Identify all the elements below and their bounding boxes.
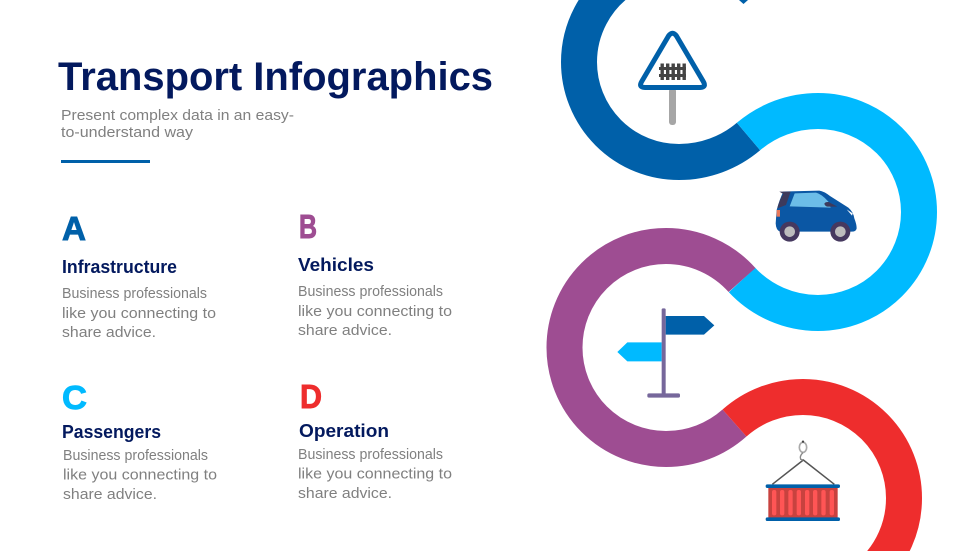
sign tip at top edge — [739, 0, 748, 4]
panel: infrastructure — [62, 210, 216, 341]
text block: Business professionals — [298, 446, 443, 463]
icon: railroad crossing sign — [641, 33, 704, 125]
icon: car — [776, 191, 857, 242]
container top bar — [766, 484, 840, 488]
heading: Operation: Operation — [299, 420, 389, 441]
text block: share advice. — [62, 324, 156, 341]
sign triangle — [641, 33, 704, 88]
container body — [768, 487, 838, 518]
title underline — [61, 160, 150, 163]
subtitle: to-understand way — [61, 124, 194, 141]
text block: Business professionals — [63, 447, 208, 464]
left sign — [617, 342, 662, 361]
text block: like you connecting to — [63, 466, 217, 484]
heading: Passengers: Passengers — [62, 421, 161, 442]
icon: shipping container on crane hook — [766, 440, 840, 521]
window — [790, 193, 831, 208]
car body — [776, 191, 857, 232]
hook — [799, 440, 807, 460]
letter C: C — [62, 379, 87, 416]
serpentine road chart — [564, 0, 919, 551]
road segment: blue — [579, 0, 748, 162]
text block — [63, 447, 217, 503]
text block: Business professionals — [62, 285, 207, 302]
road segment: cyan — [742, 111, 919, 313]
tail light — [777, 210, 780, 217]
rear window — [777, 192, 791, 208]
text block: like you connecting to — [62, 305, 216, 322]
text block: share advice. — [298, 322, 392, 339]
icon: direction signpost — [617, 308, 714, 398]
text block: like you connecting to — [298, 303, 452, 320]
text block — [298, 283, 452, 339]
subtitle — [61, 107, 294, 141]
subtitle: Present complex data in an easy- — [61, 107, 294, 124]
panel: operation — [298, 378, 452, 502]
panel: passengers — [62, 379, 217, 503]
panel: vehicles — [298, 208, 452, 339]
text block: Business professionals — [298, 283, 443, 300]
text block: share advice. — [298, 485, 392, 502]
container ribs — [772, 490, 834, 515]
front wheel — [830, 222, 850, 242]
road segment: purple — [564, 246, 742, 449]
container bottom bar — [766, 517, 840, 521]
title: Transport Infographics — [58, 55, 493, 99]
text block — [298, 446, 452, 502]
mirror — [824, 202, 837, 207]
text block: like you connecting to — [298, 466, 452, 482]
sign post — [669, 88, 676, 125]
fence — [659, 64, 686, 80]
rear wheel — [780, 222, 800, 242]
letter A: A — [62, 210, 86, 247]
right sign — [666, 316, 714, 335]
letter B: B — [299, 208, 317, 245]
road segment: red — [734, 397, 904, 551]
pole — [662, 308, 666, 396]
heading: Vehicles: Vehicles — [298, 254, 374, 275]
headlight — [847, 209, 853, 216]
letter D: D — [300, 378, 322, 415]
heading: Infrastructure: Infrastructure — [62, 256, 177, 277]
text block: share advice. — [63, 486, 157, 503]
cables — [772, 460, 834, 484]
base — [647, 393, 680, 398]
text block — [62, 285, 216, 341]
